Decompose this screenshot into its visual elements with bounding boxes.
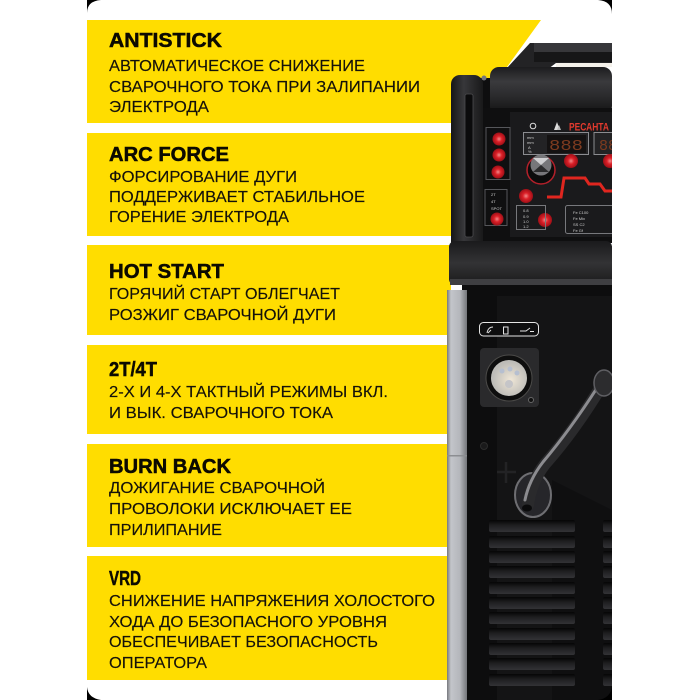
brand: РЕСАНТА [569, 122, 609, 134]
block: HOT START: HOT START [109, 261, 224, 283]
wire size box: 0.9 [523, 214, 529, 219]
digital display 2: 88 [599, 138, 617, 155]
connector label [480, 322, 538, 336]
digital display 1: mm [527, 140, 534, 145]
silver strip [447, 290, 467, 700]
block: HOT START [109, 261, 340, 324]
handle [507, 43, 612, 69]
screw [480, 442, 488, 450]
material box: SS C2 [573, 222, 585, 227]
block: ARC FORCE: ПОДДЕРЖИВАЕТ СТАБИЛЬНОЕ [109, 189, 365, 206]
material box: Fe Mix [573, 216, 585, 221]
yellow background bands [87, 20, 541, 680]
block: ANTISTICK: СВАРОЧНОГО ТОКА ПРИ ЗАЛИПАНИИ [109, 79, 420, 96]
adjustment knob [527, 154, 555, 184]
top roll [490, 67, 612, 108]
bottom bar of the panel [449, 241, 612, 285]
mode button group: 2T [491, 192, 496, 197]
material box: Fe C100 [573, 210, 589, 215]
block: ARC FORCE: ARC FORCE [109, 144, 229, 166]
left side panel [451, 75, 486, 242]
block: VRD: ХОДА ДО БЕЗОПАСНОГО УРОВНЯ [109, 614, 387, 631]
block: BURN BACK [109, 456, 352, 539]
connector socket [480, 348, 539, 407]
gap filler between side panel and roll [480, 78, 490, 108]
digital display 2 [594, 132, 612, 155]
mode button group: 4T [491, 199, 496, 204]
wire size box: 0.8 [523, 208, 529, 213]
block: ANTISTICK [109, 30, 420, 116]
digital display 1: 888 [549, 138, 583, 155]
welding machine photo [447, 43, 626, 700]
block: HOT START: РОЗЖИГ СВАРОЧНОЙ ДУГИ [109, 305, 336, 324]
block: BURN BACK: ПРОВОЛОКИ ИСКЛЮЧАЕТ ЕЕ [109, 501, 352, 518]
block: ARC FORCE [109, 144, 365, 226]
block: VRD: ОПЕРАТОРА [109, 655, 207, 672]
block: BURN BACK: ПРИЛИПАНИЕ [109, 522, 222, 539]
block: ANTISTICK: АВТОМАТИЧЕСКОЕ СНИЖЕНИЕ [109, 58, 365, 75]
block: 2T/4T [109, 359, 388, 422]
ventilation slots [489, 520, 615, 686]
block: ANTISTICK: ANTISTICK [109, 30, 223, 52]
lower body [462, 285, 612, 700]
material box [565, 205, 612, 234]
block: ARC FORCE: ГОРЕНИЕ ЭЛЕКТРОДА [109, 209, 289, 226]
block: 2T/4T: 2T/4T [109, 359, 157, 381]
status icons [530, 122, 561, 130]
block: 2T/4T: 2-Х И 4-Х ТАКТНЫЙ РЕЖИМЫ ВКЛ. [109, 382, 388, 401]
mode button group [485, 128, 510, 226]
digital display 1 [524, 132, 588, 155]
wire size box: 1.2 [523, 224, 529, 229]
block: 2T/4T: И ВЫК. СВАРОЧНОГО ТОКА [109, 405, 333, 422]
block: ARC FORCE: ФОРСИРОВАНИЕ ДУГИ [109, 169, 297, 186]
block: BURN BACK: BURN BACK [109, 456, 232, 478]
block: VRD: СНИЖЕНИЕ НАПРЯЖЕНИЯ ХОЛОСТОГО [109, 593, 435, 610]
rounded black image corners [87, 0, 612, 700]
welding cycle red line [547, 178, 612, 197]
block: ANTISTICK: ЭЛЕКТРОДА [109, 99, 209, 116]
block: HOT START: ГОРЯЧИЙ СТАРТ ОБЛЕГЧАЕТ [109, 284, 340, 303]
control panel background [480, 108, 612, 243]
material box: Fe Gf [573, 228, 584, 233]
block: BURN BACK: ДОЖИГАНИЕ СВАРОЧНОЙ [109, 478, 325, 497]
red function buttons [519, 154, 617, 227]
block: VRD: VRD [109, 568, 141, 590]
mode button group: SPOT [491, 206, 502, 211]
plus mark [497, 462, 516, 483]
wire size box: 1.0 [523, 219, 529, 224]
cable [515, 370, 614, 517]
digital display 1: A [528, 145, 531, 150]
wire size box [516, 206, 546, 230]
block: VRD: ОБЕСПЕЧИВАЕТ БЕЗОПАСНОСТЬ [109, 634, 378, 651]
digital display 1: % [528, 149, 532, 154]
digital display 1: mm [527, 135, 534, 140]
block: VRD [109, 568, 435, 672]
